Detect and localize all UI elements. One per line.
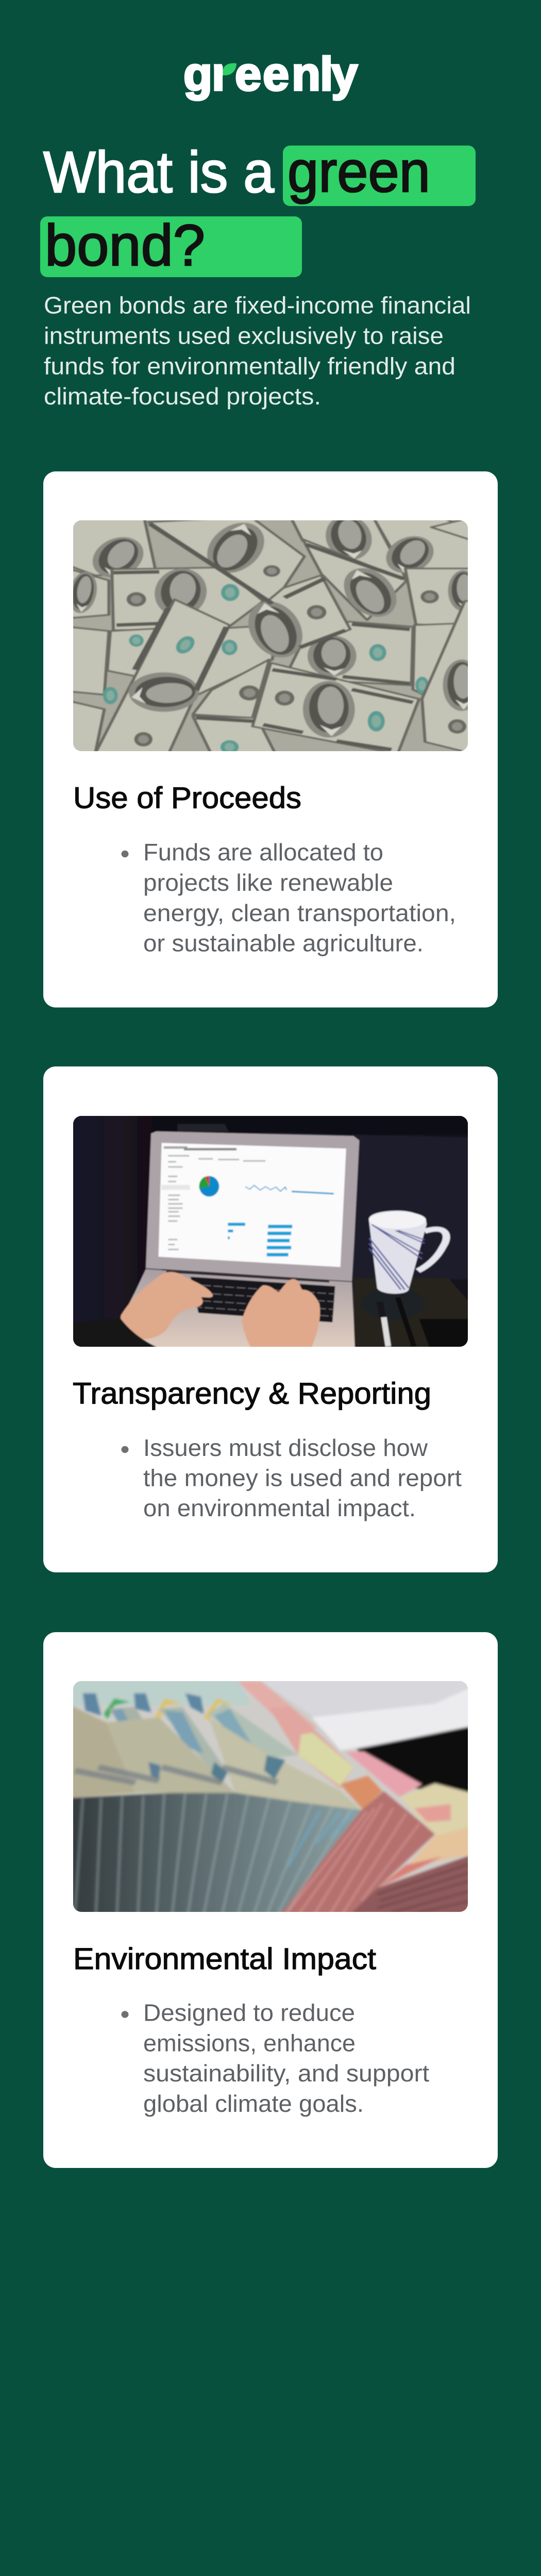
bullet text	[143, 1999, 429, 2117]
bullet text: energy, clean transportation,	[143, 900, 456, 926]
panel: transparency and reporting	[43, 1066, 498, 1572]
icon: leaf on the r	[223, 63, 236, 75]
photo: scattered hundred dollar bills	[66, 514, 481, 754]
intro paragraph: funds for environmentally friendly and	[44, 352, 455, 379]
bullet dot	[122, 2011, 129, 2018]
intro paragraph: Green bonds are fixed-income financial	[44, 292, 471, 318]
title text: bond?: bond?	[45, 213, 205, 278]
photo: fanned stacks of banknotes	[67, 1674, 477, 1918]
bullet text: or sustainable agriculture.	[143, 929, 424, 956]
bullet text: emissions, enhance	[143, 2030, 356, 2057]
bullet dot	[122, 1446, 129, 1453]
bullet text: sustainability, and support	[143, 2060, 429, 2087]
heading: environmental impact: Environmental Impact	[73, 1942, 376, 1976]
title	[40, 139, 476, 278]
intro paragraph: instruments used exclusively to raise	[44, 323, 444, 349]
title highlight: bond	[40, 216, 302, 277]
bullet text: the money is used and report	[143, 1464, 462, 1491]
bullet text: Funds are allocated to	[143, 839, 383, 866]
photo: laptop with analytics dashboard and mug	[67, 1113, 477, 1350]
heading: use of proceeds: Use of Proceeds	[73, 781, 301, 815]
bullet text: projects like renewable	[143, 869, 393, 896]
bullet text	[143, 839, 456, 956]
bullet text: on environmental impact.	[143, 1495, 416, 1521]
logo: greenly: greenly	[183, 48, 358, 100]
bullet text: Designed to reduce	[143, 1999, 355, 2026]
bullet text: Issuers must disclose how	[143, 1434, 428, 1461]
intro paragraph	[44, 292, 471, 410]
card background	[43, 1066, 498, 1572]
intro paragraph: climate-focused projects.	[44, 383, 321, 410]
panel: environmental impact	[43, 1632, 498, 2168]
bullet dot	[122, 851, 129, 857]
title highlight: green	[283, 145, 476, 206]
bullet text: global climate goals.	[143, 2090, 364, 2117]
heading: transparency and reporting: Transparency & Reporting	[73, 1377, 431, 1411]
card background	[43, 471, 498, 1008]
bullet text	[143, 1434, 462, 1521]
title text: green: green	[288, 139, 430, 204]
panel: use of proceeds	[43, 471, 498, 1008]
card background	[43, 1632, 498, 2168]
title text: What is a: What is a	[43, 140, 274, 205]
